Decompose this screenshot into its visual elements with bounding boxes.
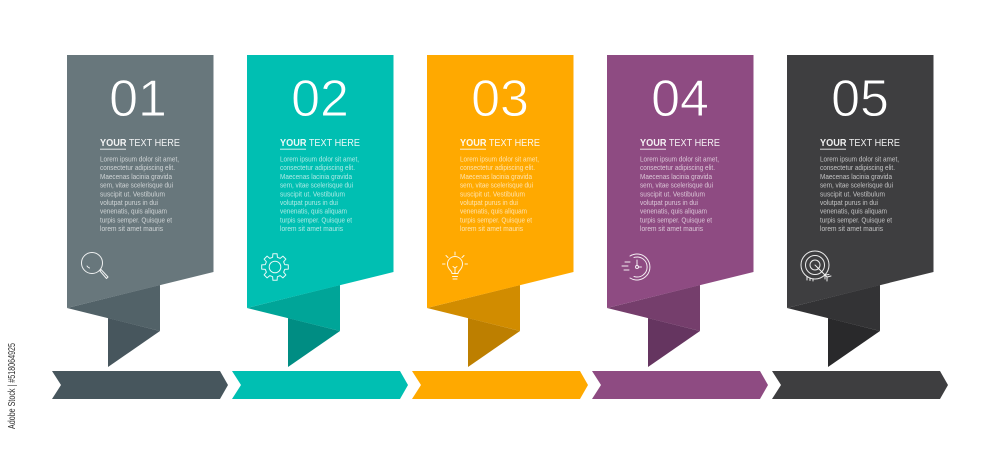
- body text: sem, vitae scelerisque dui: [820, 181, 893, 190]
- body text: volutpat purus in dui: [820, 198, 878, 207]
- number: 03: [471, 70, 529, 128]
- body text: Maecenas lacinia gravida: [460, 172, 533, 181]
- body text: Maecenas lacinia gravida: [640, 172, 713, 181]
- body text: lorem sit amet mauris: [100, 224, 163, 233]
- body text: Lorem ipsum dolor sit amet,: [100, 154, 179, 164]
- panel: step 05: [787, 55, 934, 367]
- panel: step 01: [67, 55, 214, 367]
- card: [787, 55, 934, 308]
- body text: suscipit ut. Vestibulum: [460, 189, 525, 198]
- icon: light bulb: [442, 252, 468, 279]
- number: 05: [831, 70, 889, 128]
- arrow: step 02: [232, 371, 408, 399]
- body text: Lorem ipsum dolor sit amet,: [820, 154, 899, 164]
- body text: lorem sit amet mauris: [640, 224, 703, 233]
- body text: lorem sit amet mauris: [820, 224, 883, 233]
- body text: sem, vitae scelerisque dui: [100, 181, 173, 190]
- card: [247, 55, 394, 308]
- body text: Lorem ipsum dolor sit amet,: [280, 154, 359, 164]
- arrow: step 05: [772, 371, 948, 399]
- body text: sem, vitae scelerisque dui: [280, 181, 353, 190]
- fold: middle band: [607, 285, 700, 331]
- body text: lorem sit amet mauris: [280, 224, 343, 233]
- heading: YOUR TEXT HERE: [640, 138, 720, 149]
- body text: turpis semper. Quisque et: [280, 215, 352, 224]
- body text: suscipit ut. Vestibulum: [280, 189, 345, 198]
- body text: venenatis, quis aliquam: [100, 207, 167, 216]
- number: 04: [651, 70, 709, 128]
- body text: [820, 154, 899, 233]
- stock id caption: Adobe Stock | #518064925: [7, 343, 18, 429]
- body text: consectetur adipiscing elit.: [460, 163, 535, 172]
- fold: lower triangle: [468, 318, 520, 367]
- fold: middle band: [427, 285, 520, 331]
- body text: suscipit ut. Vestibulum: [640, 189, 705, 198]
- body text: lorem sit amet mauris: [460, 224, 523, 233]
- body text: sem, vitae scelerisque dui: [640, 181, 713, 190]
- body text: volutpat purus in dui: [100, 198, 158, 207]
- body text: [460, 154, 539, 233]
- body text: venenatis, quis aliquam: [820, 207, 887, 216]
- body text: Lorem ipsum dolor sit amet,: [640, 154, 719, 164]
- panel: step 03: [427, 55, 574, 367]
- fold: lower triangle: [648, 318, 700, 367]
- fold: lower triangle: [828, 318, 880, 367]
- fold: middle band: [247, 285, 340, 331]
- body text: Maecenas lacinia gravida: [100, 172, 173, 181]
- arrow: step 04: [592, 371, 768, 399]
- body text: turpis semper. Quisque et: [460, 215, 532, 224]
- body text: consectetur adipiscing elit.: [820, 163, 895, 172]
- panel: step 02: [247, 55, 394, 367]
- body text: Maecenas lacinia gravida: [820, 172, 893, 181]
- panel: step 04: [607, 55, 754, 367]
- body text: venenatis, quis aliquam: [280, 207, 347, 216]
- body text: volutpat purus in dui: [280, 198, 338, 207]
- body text: Maecenas lacinia gravida: [280, 172, 353, 181]
- heading: YOUR TEXT HERE: [280, 138, 360, 149]
- body text: consectetur adipiscing elit.: [280, 163, 355, 172]
- body text: [100, 154, 179, 233]
- icon: target with arrow: [801, 251, 831, 281]
- heading: YOUR TEXT HERE: [100, 138, 180, 149]
- fold: middle band: [67, 285, 160, 331]
- card: [427, 55, 574, 308]
- body text: [640, 154, 719, 233]
- number: 01: [109, 70, 167, 128]
- body text: Lorem ipsum dolor sit amet,: [460, 154, 539, 164]
- body text: consectetur adipiscing elit.: [100, 163, 175, 172]
- card: [67, 55, 214, 308]
- body text: venenatis, quis aliquam: [640, 207, 707, 216]
- number: 02: [291, 70, 349, 128]
- icon: magnifier: [82, 252, 108, 278]
- arrow: step 01: [52, 371, 228, 399]
- body text: venenatis, quis aliquam: [460, 207, 527, 216]
- body text: volutpat purus in dui: [640, 198, 698, 207]
- body text: volutpat purus in dui: [460, 198, 518, 207]
- icon: gear: [262, 254, 288, 280]
- icon: fast clock: [622, 254, 650, 280]
- body text: suscipit ut. Vestibulum: [100, 189, 165, 198]
- card: [607, 55, 754, 308]
- heading: YOUR TEXT HERE: [460, 138, 540, 149]
- body text: turpis semper. Quisque et: [820, 215, 892, 224]
- body text: consectetur adipiscing elit.: [640, 163, 715, 172]
- fold: lower triangle: [288, 318, 340, 367]
- arrow: step 03: [412, 371, 588, 399]
- heading: YOUR TEXT HERE: [820, 138, 900, 149]
- body text: [280, 154, 359, 233]
- body text: sem, vitae scelerisque dui: [460, 181, 533, 190]
- fold: lower triangle: [108, 318, 160, 367]
- body text: turpis semper. Quisque et: [640, 215, 712, 224]
- fold: middle band: [787, 285, 880, 331]
- body text: suscipit ut. Vestibulum: [820, 189, 885, 198]
- body text: turpis semper. Quisque et: [100, 215, 172, 224]
